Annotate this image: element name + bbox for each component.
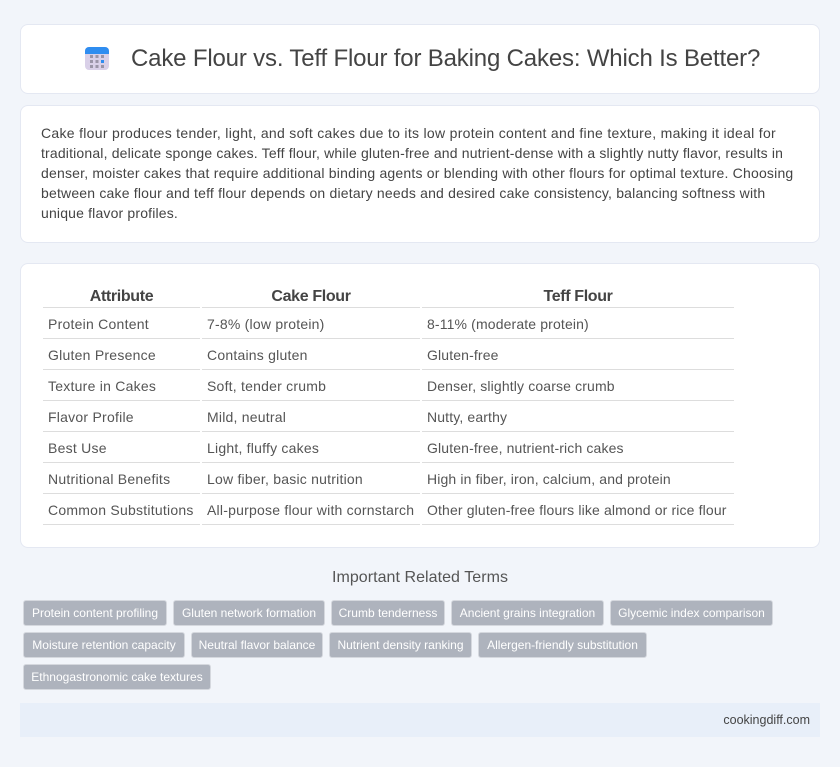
comparison table: All-purpose flour with cornstarch xyxy=(207,502,414,518)
comparison table: Flavor Profile xyxy=(48,409,134,425)
comparison table: Light, fluffy cakes xyxy=(207,440,319,456)
comparison table: Mild, neutral xyxy=(207,409,286,425)
summary text: between cake flour and teff flour depends on dietary needs and desired cake consistency, balancing softness with xyxy=(41,185,765,201)
related terms tags: Ethnogastronomic cake textures xyxy=(31,670,203,684)
comparison table: Denser, slightly coarse crumb xyxy=(427,378,615,394)
related terms tags: Allergen-friendly substitution xyxy=(487,638,638,652)
icon: calendar xyxy=(85,47,109,70)
comparison table: Nutritional Benefits xyxy=(48,471,170,487)
comparison table: Gluten-free xyxy=(427,347,499,363)
related terms tags: Gluten network formation xyxy=(182,606,316,620)
comparison table: Gluten-free, nutrient-rich cakes xyxy=(427,440,624,456)
table header: cake flour xyxy=(202,288,420,308)
related terms tags: Nutrient density ranking xyxy=(337,638,464,652)
related terms tags: Neutral flavor balance xyxy=(199,638,315,652)
comparison table: High in fiber, iron, calcium, and protein xyxy=(427,471,671,487)
comparison table: Contains gluten xyxy=(207,347,308,363)
table header: teff flour xyxy=(422,288,734,308)
summary text: Cake flour produces tender, light, and soft cakes due to its low protein content and fine texture, making it ideal for xyxy=(41,125,776,141)
panel: comparison table xyxy=(20,263,820,548)
comparison table: 8-11% (moderate protein) xyxy=(427,316,589,332)
summary text: traditional, delicate sponge cakes. Teff flour, while gluten-free and nutrient-dense with a slightly nutty flavor, results in xyxy=(41,145,783,161)
comparison table: Soft, tender crumb xyxy=(207,378,326,394)
panel: summary xyxy=(20,105,820,243)
footer source: cookingdiff.com xyxy=(723,713,810,727)
table header: cake flour: Cake Flour xyxy=(271,288,351,305)
summary text: denser, moister cakes that require additional binding agents or blending with other flours for optimal texture. Choosing xyxy=(41,165,793,181)
footer bar xyxy=(20,703,820,737)
related terms heading: Important Related Terms xyxy=(332,569,508,586)
related terms tags xyxy=(23,600,773,690)
comparison table: Protein Content xyxy=(48,316,149,332)
header panel xyxy=(20,24,820,94)
comparison table: Gluten Presence xyxy=(48,347,156,363)
related terms tags: Ancient grains integration xyxy=(460,606,595,620)
comparison table xyxy=(43,288,734,525)
table header: teff flour: Teff Flour xyxy=(543,288,613,305)
comparison table: Low fiber, basic nutrition xyxy=(207,471,363,487)
table header: attribute: Attribute xyxy=(90,288,153,305)
comparison table: Nutty, earthy xyxy=(427,409,507,425)
related terms tags: Protein content profiling xyxy=(32,606,158,620)
comparison table: Other gluten-free flours like almond or rice flour xyxy=(427,502,727,518)
summary text: unique flavor profiles. xyxy=(41,205,178,221)
comparison table: Common Substitutions xyxy=(48,502,194,518)
table header: attribute xyxy=(43,288,200,308)
comparison table: 7-8% (low protein) xyxy=(207,316,325,332)
comparison table: Texture in Cakes xyxy=(48,378,156,394)
related terms tags: Moisture retention capacity xyxy=(32,638,176,652)
related terms tags: Glycemic index comparison xyxy=(618,606,765,620)
title: Cake Flour vs. Teff Flour for Baking Cakes: Which Is Better? xyxy=(131,45,760,72)
related terms tags: Crumb tenderness xyxy=(339,606,437,620)
summary text xyxy=(41,125,793,221)
comparison table: Best Use xyxy=(48,440,107,456)
